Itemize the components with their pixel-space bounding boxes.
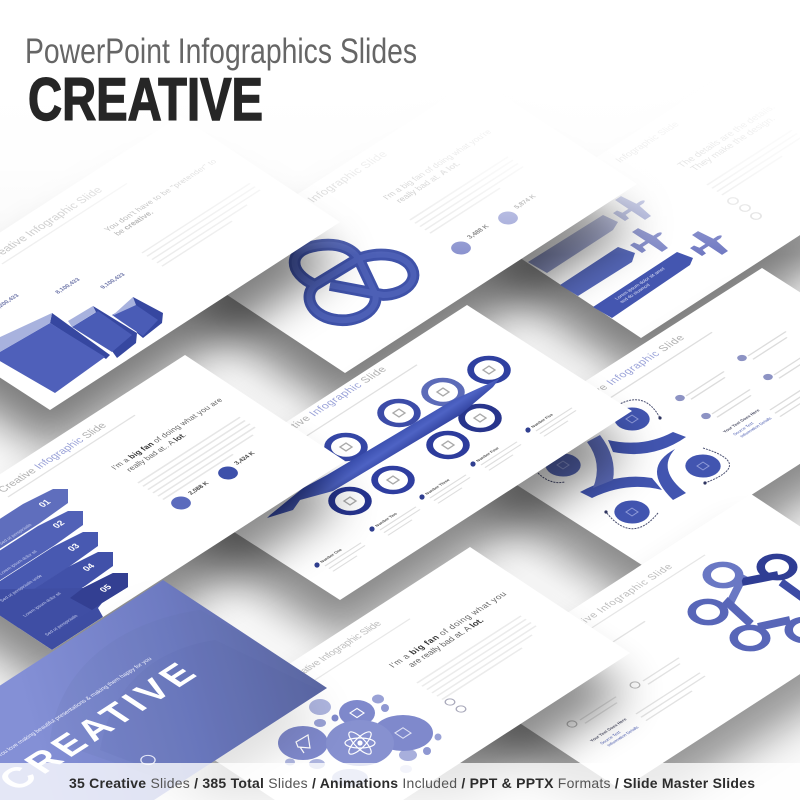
ring left (685, 597, 731, 627)
stat circle 2 (214, 464, 242, 482)
small icons (726, 196, 763, 221)
icon: atom (345, 729, 375, 757)
arrow numbers: 04 (80, 562, 97, 573)
ring bottom (727, 623, 773, 653)
arrow captions: Lorem ipsum dolor sit amet (614, 266, 667, 301)
large bubble: top (339, 700, 375, 726)
circle left (538, 449, 588, 481)
arrow 05 head (70, 573, 128, 610)
ring 3 (373, 396, 425, 430)
3D bar 3 (112, 297, 163, 338)
label titles: Number Three (424, 478, 451, 496)
stat label 2: 3,424 K (233, 450, 257, 466)
large bubble: atom (326, 720, 394, 766)
sub heading line (315, 619, 410, 680)
slide: trefoil knot (top centre) (185, 78, 637, 413)
statement: are really bad at. A lot. (405, 616, 486, 669)
icon: megaphone (296, 735, 310, 753)
diagonal bar (267, 378, 500, 518)
arrow numbers: 01 (36, 498, 53, 509)
label titles: Number Five (530, 412, 555, 429)
heading: Creative Infographic Slide (564, 333, 688, 413)
cover subtitle: You love making beautiful presentations & making them happy for you (0, 657, 154, 758)
stat circle 1 (447, 239, 475, 257)
chart value 2: 8,100,433 (55, 277, 82, 295)
statement: The details are the details. (675, 103, 778, 170)
statement: be creative. (112, 209, 156, 237)
large bubble: right (373, 715, 433, 751)
circle right (678, 450, 728, 482)
heading: Creative Infographic Slide (285, 619, 385, 684)
body text lines (142, 183, 270, 266)
ring 6 (422, 428, 474, 462)
label titles (319, 412, 555, 564)
slide: star and circles (right middle) (470, 268, 800, 605)
list icon 2 (628, 681, 642, 689)
title: CREATIVE: CREATIVE (28, 66, 263, 133)
circle bottom (607, 496, 657, 528)
numbered arrow stack (0, 489, 128, 663)
slide: hexagonal knot (bottom right) (459, 494, 800, 800)
statement: really bad at. A lot. (393, 160, 462, 204)
feature icons (673, 354, 775, 420)
ring 4 (320, 430, 372, 464)
dashed orbit arrows (538, 400, 730, 529)
arrow captions: Sed ut perspiciatis (44, 613, 79, 637)
body text lines (417, 616, 546, 700)
circle icons (557, 415, 709, 516)
stat circle 1 (167, 494, 195, 512)
arrow 05 (0, 573, 128, 650)
ring 1 (463, 353, 515, 387)
bottom band (0, 763, 800, 800)
ring right (782, 615, 800, 645)
3D bar 2 (68, 306, 137, 358)
label titles: Number Two (374, 511, 399, 528)
arrow captions: sed do eiusmod (619, 283, 652, 304)
circle top (607, 403, 657, 435)
arrow 2 (560, 247, 635, 296)
trefoil knot (295, 245, 414, 320)
hex knot connectors (725, 575, 800, 627)
label dots (314, 427, 531, 568)
heading: Creative Infographic Slide (556, 562, 676, 640)
statement: I'm a big fan of doing what you are (109, 396, 225, 471)
contact label (589, 717, 640, 750)
statement: I'm a big fan of doing what you (386, 590, 509, 669)
body text lines (410, 157, 528, 233)
label titles: Number Four (475, 446, 500, 463)
orbit arrow heads (604, 416, 707, 514)
list text lines (580, 621, 710, 723)
slide: rings and bar (centre) (175, 305, 632, 640)
contact label: Information Details (606, 725, 640, 747)
sub heading line (305, 365, 417, 437)
label text lines (325, 408, 580, 571)
arrow numbers (36, 498, 114, 594)
title: subtitle line: PowerPoint Infographics Slides (25, 32, 417, 71)
check icons (443, 698, 468, 713)
cover arcs (100, 660, 322, 763)
ring 2 (417, 375, 469, 409)
arrow numbers: 05 (97, 583, 114, 594)
icon: right bubble (395, 728, 411, 738)
slide: numbered arrows (left middle) (0, 355, 345, 690)
icon: cover badge (138, 753, 158, 767)
statement: really bad at.. A lot. (124, 432, 189, 473)
arrow numbers: 02 (50, 519, 67, 530)
label titles: Number One (319, 547, 344, 564)
star arc bottom (580, 477, 662, 498)
statement: I'm a big fan of doing what you're (380, 128, 494, 201)
ring 5 (454, 401, 506, 435)
chart value 3: 9,100,433 (100, 272, 127, 290)
slide: bubbles (bottom centre) (178, 547, 630, 800)
contact label: Your Text Goes Here (589, 717, 628, 743)
feature list: 35 Creative Slides / 385 Total Slides / Animations Included / PPT & PPTX Formats / Slide Master Slides (69, 775, 755, 791)
list icon 1 (565, 720, 579, 728)
arrow 01 (0, 489, 68, 549)
sub heading line (607, 332, 712, 400)
small bubbles (285, 694, 442, 787)
statement: They make the design. (688, 115, 778, 173)
contact label (722, 408, 773, 441)
arrow 02 (0, 511, 83, 580)
stat label 1: 3,488 K (466, 224, 491, 240)
contact label: Your Text Goes Here (722, 408, 761, 434)
airplane 1 (604, 191, 660, 227)
stat label 2: 5,874 K (513, 194, 538, 210)
arrow captions: Lorem ipsum dolor sit (22, 591, 63, 618)
star arc top (608, 432, 686, 454)
sub heading line (590, 555, 705, 629)
stat label 1: 2,088 K (187, 480, 211, 496)
body text lines (707, 130, 800, 195)
arrow 1 (528, 215, 618, 273)
ring 7 (367, 463, 419, 497)
ring 8 (324, 484, 376, 518)
airplane 2 (621, 223, 676, 259)
star arc right (657, 449, 686, 500)
arrow numbers: 03 (65, 542, 82, 553)
slide: airplanes arrows (top right) (481, 43, 800, 378)
3D bar 1 (0, 313, 110, 393)
stat circle 2 (494, 209, 522, 227)
contact label: Source Text (732, 421, 755, 436)
large bubble: megaphone (278, 726, 328, 760)
icon: chart box (350, 708, 364, 718)
arrow 3 (593, 252, 693, 318)
heading: Infographic Slide (613, 120, 682, 165)
feature text lines (686, 331, 800, 417)
ring top left (700, 560, 746, 590)
heading: Creative Infographic Slide (267, 365, 390, 444)
arrow 04 (0, 552, 113, 628)
sub heading line (8, 415, 135, 497)
body text lines (138, 417, 265, 500)
airplane 3 (681, 226, 736, 262)
slide: blue cover (bottom left) (0, 580, 340, 800)
sub heading line (2, 183, 127, 264)
contact label: Source Text (599, 730, 622, 745)
slide: 3D bar chart (top left) (0, 116, 340, 450)
arrow captions (0, 522, 79, 637)
star arc left (587, 435, 614, 488)
arrow 03 (0, 532, 98, 590)
top fade overlay (0, 0, 800, 260)
ring top right (754, 552, 800, 582)
bubble cluster (278, 694, 442, 787)
statement: You don't have to be "pretender" to (102, 157, 219, 233)
contact label: Information Details (739, 416, 773, 438)
heading: Infographic Slide (305, 150, 391, 205)
